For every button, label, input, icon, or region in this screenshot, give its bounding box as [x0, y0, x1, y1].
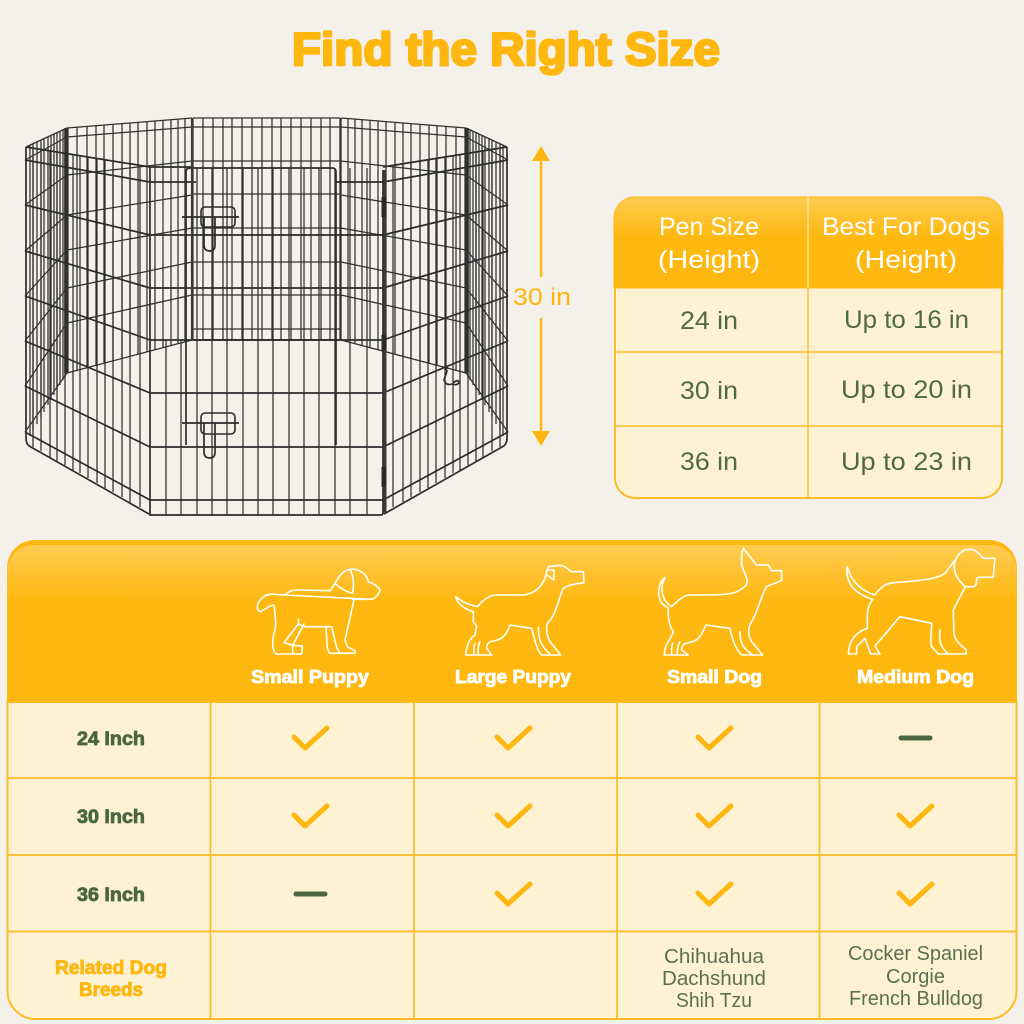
- related dog breeds label: Related Dog: [55, 958, 167, 979]
- header labels: [658, 213, 990, 274]
- row labels: 24 Inch: [77, 729, 145, 750]
- back centre panel: [193, 118, 340, 340]
- breeds: medium dog: Cocker Spaniel: [848, 943, 983, 965]
- table rows: 36 in: [680, 448, 738, 476]
- table body: [8, 702, 1016, 1019]
- hook: [444, 366, 459, 385]
- dog category labels: Medium Dog: [857, 667, 974, 687]
- row labels: 30 Inch: [77, 807, 145, 828]
- breeds: medium dog: Corgie: [886, 966, 945, 988]
- header divider: [807, 197, 809, 288]
- check marks row 24 inch: [294, 728, 930, 748]
- table rows: 24 in: [680, 307, 738, 335]
- dog category labels: Small Puppy: [251, 667, 369, 687]
- breeds: medium dog: French Bulldog: [849, 988, 983, 1010]
- icon: small dog: [659, 548, 782, 655]
- door latch: lower: [182, 413, 239, 458]
- breeds: small dog: [662, 946, 766, 1012]
- breeds: small dog: Shih Tzu: [676, 990, 752, 1012]
- table rows: 30 in: [680, 377, 738, 405]
- header labels: (Height): [855, 246, 957, 274]
- left side panels: [25, 118, 192, 514]
- table rows: Up to 23 in: [841, 448, 972, 476]
- related dog breeds label: [55, 958, 167, 1001]
- table: pen size vs dog height: [614, 197, 1003, 498]
- front centre panel with door: [150, 118, 383, 515]
- row labels: [77, 729, 145, 906]
- header gradient: [7, 545, 1017, 702]
- table grid: [615, 288, 1002, 498]
- dog category labels: [251, 667, 974, 687]
- header labels: Pen Size: [659, 213, 759, 241]
- header labels: (Height): [658, 246, 760, 274]
- comparison table: [7, 540, 1017, 1019]
- breeds: small dog: Chihuahua: [664, 946, 765, 968]
- table rows: [680, 306, 972, 476]
- hinges and post: [384, 170, 385, 514]
- dog category labels: Small Dog: [667, 667, 762, 687]
- check marks row 36 inch: [296, 884, 932, 904]
- table rows: Up to 16 in: [844, 306, 969, 334]
- header band: [7, 540, 1017, 702]
- illustration: wire dog playpen: [25, 118, 508, 515]
- table header: [614, 197, 1003, 288]
- breeds: medium dog: [848, 943, 983, 1010]
- icon: medium dog: [847, 549, 995, 654]
- dog category labels: Large Puppy: [455, 667, 571, 687]
- title: Find the Right Size: [292, 23, 720, 75]
- header labels: Best For Dogs: [822, 213, 990, 241]
- icon: small puppy: [257, 569, 380, 654]
- right side panels (mirror): [341, 118, 508, 514]
- row labels: 36 Inch: [77, 885, 145, 906]
- door latch: upper: [182, 207, 239, 251]
- related dog breeds label: Breeds: [79, 980, 143, 1001]
- breeds: small dog: Dachshund: [662, 968, 766, 990]
- dimension arrow: 30 in: [513, 146, 571, 446]
- grid lines: [7, 702, 1017, 1019]
- icon: large puppy: [456, 565, 584, 655]
- dimension arrow: 30 in: 30 in: [513, 284, 571, 311]
- check marks row 30 inch: [294, 806, 932, 826]
- table rows: Up to 20 in: [841, 376, 972, 404]
